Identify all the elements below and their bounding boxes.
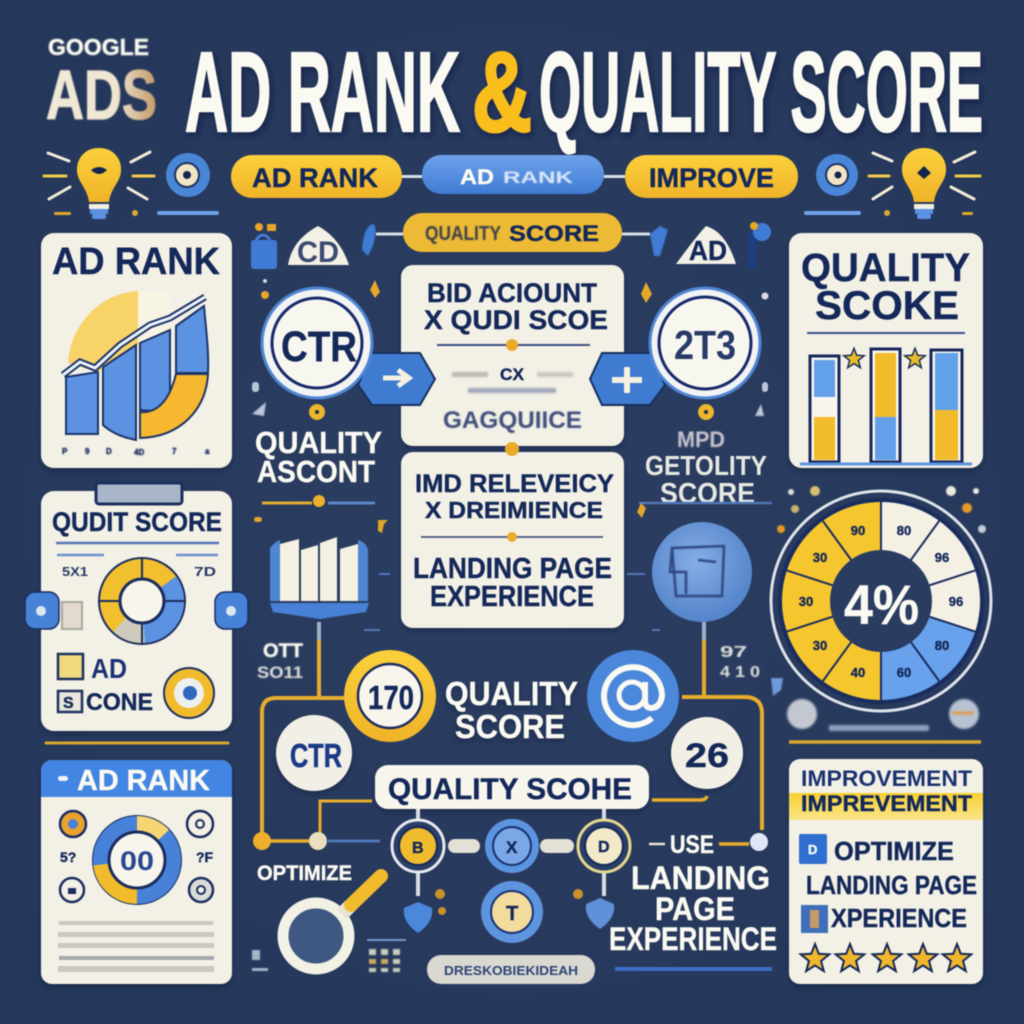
icon: left diamond [252, 382, 325, 420]
text lines [58, 921, 214, 972]
panel: formula box one: GAGQUIICE [443, 407, 582, 434]
panel: quality score chart card: SCOKE [815, 284, 959, 328]
axis labels: 9 [85, 447, 90, 456]
formula text: IMD RELEVEICY [415, 470, 614, 498]
main title: AD RANK [185, 29, 460, 155]
icon: bar stand [270, 537, 369, 619]
label: small right values [720, 644, 760, 681]
bar chart [800, 349, 972, 464]
flow node: lower: T [506, 903, 518, 925]
label: small left values: SO11 [257, 663, 303, 682]
star rating [801, 944, 971, 971]
connector dot [505, 442, 519, 456]
label: quality ascont: ASCONT [257, 454, 375, 489]
flow node: yellow: B [412, 840, 424, 857]
axis labels: 4D [134, 448, 144, 457]
panel: ad rank chart card [41, 233, 232, 468]
panel: ad rank donut card [41, 760, 232, 984]
icon: left target [166, 153, 210, 197]
panel: formula box two: EXPERIENCE [430, 581, 594, 613]
badge: right numeric circle [650, 288, 760, 398]
pill: small caption: DRESKOBIEKIDEAH [444, 963, 578, 978]
icon: left decorative figure [251, 223, 380, 299]
icon: AD tent badge: AD [689, 235, 727, 266]
decorative left dashes [54, 210, 219, 216]
main title: & [472, 29, 532, 155]
label: small right values: 97 [720, 644, 747, 661]
pill: blue ad: RANK [503, 168, 574, 187]
card [789, 233, 983, 468]
side tabs [25, 592, 248, 629]
label: small left values: OTT [263, 641, 303, 662]
axis labels: P [62, 447, 68, 456]
connector: right flow line [682, 622, 762, 830]
legend [58, 653, 153, 716]
card [789, 759, 983, 984]
icon: right target [816, 154, 858, 196]
wheel labels: 96 [949, 594, 963, 609]
heading: QUALITY [801, 246, 970, 290]
pill: ad rank: AD RANK [252, 163, 379, 193]
connector: flow links [418, 809, 604, 896]
decorative right dashes [804, 210, 973, 216]
axis labels: a [205, 447, 210, 456]
arrow: right-pointing tag [358, 353, 435, 405]
label: small right values: 4 1 0 [720, 664, 760, 681]
flow node: cream [578, 820, 630, 872]
badge: left CTR circle [262, 288, 372, 398]
divider: blue lower [615, 967, 772, 971]
panel: formula box one: X QUDI SCOE [424, 305, 608, 335]
icon: magnifier [283, 876, 381, 969]
legend: CONE [86, 689, 153, 716]
icon: map circle [652, 522, 752, 622]
title group [46, 29, 983, 155]
heading: IMPROVEMENT [801, 766, 973, 791]
highlighted heading: IMPREVEMENT [801, 791, 973, 816]
icon: right light bulb [869, 148, 980, 219]
stars [844, 348, 925, 368]
label: quality score right: MPD [677, 427, 725, 452]
pill: small caption [427, 955, 595, 984]
badge: 170 circle: 170 [368, 679, 414, 716]
wheel labels: 40 [851, 665, 865, 680]
icon: grey blobs [787, 699, 979, 731]
card [41, 491, 232, 731]
panel: formula box two: LANDING PAGE [413, 553, 612, 585]
label: quality score center: QUALITY [445, 675, 578, 712]
Google Ads logo text: ADS [46, 56, 157, 134]
pill: improve: IMPROVE [649, 163, 774, 193]
clip tab [96, 483, 182, 504]
panel: ad rank donut card: ?F [196, 849, 214, 865]
item: optimize: D [808, 842, 817, 857]
wheel labels: 30 [799, 594, 813, 609]
label: use landing page experience: USE [670, 831, 714, 859]
flow node: lower [481, 881, 543, 943]
small icons [60, 811, 213, 902]
mini labels: 5? [60, 849, 76, 865]
wheel labels: 80 [897, 523, 911, 538]
icon: small grid [252, 940, 406, 972]
label: quality score right [645, 427, 767, 510]
wheel labels: 96 [935, 550, 949, 565]
panel: formula box two: X DREIMIENCE [425, 497, 603, 523]
card [41, 760, 232, 984]
pill: blue ad: AD [460, 166, 494, 189]
decorative center-left markers [254, 495, 390, 630]
donut chart [92, 815, 182, 905]
pill: improve [625, 155, 798, 198]
label: quality score right: SCORE [660, 478, 755, 510]
panel: formula box one: CX [500, 365, 525, 384]
Google Ads logo text [46, 34, 157, 134]
arrow: plus tag [590, 353, 665, 405]
icon: ring [164, 668, 214, 718]
wheel labels: 90 [851, 523, 865, 538]
label: small left values [257, 641, 303, 682]
wheel labels: 80 [935, 638, 949, 653]
card [41, 233, 232, 468]
label: use landing page experience: PAGE [655, 891, 735, 927]
item: optimize: OPTIMIZE [834, 836, 954, 866]
wheel labels: 60 [897, 665, 911, 680]
pill: blue ad [422, 155, 604, 194]
panel: quality score chart card [789, 233, 983, 468]
heading: QUDIT SCORE [52, 507, 222, 537]
badge: 26: 26 [685, 737, 729, 775]
icon: right decorative figure [641, 222, 771, 303]
label: quality ascont: QUALITY [255, 425, 382, 460]
badge: 170 circle [344, 650, 436, 742]
donut chart: 00 [120, 846, 154, 876]
divider: right yellow [789, 740, 981, 744]
icon: CD tent badge [288, 226, 349, 269]
item: landing page: LANDING PAGE [806, 870, 977, 900]
badge: left CTR circle: CTR [281, 323, 357, 371]
decorative right center marks [627, 503, 772, 630]
icons: shields and dots [404, 889, 614, 933]
heading: AD RANK [77, 765, 210, 797]
badge: right numeric circle: 2T3 [674, 322, 736, 368]
panel: quality score donut card: 7D [194, 564, 216, 579]
badge: 26 [671, 717, 743, 789]
chart [63, 291, 208, 440]
panel: quality score donut card [25, 483, 248, 731]
label: use landing page experience [609, 831, 777, 957]
card [401, 265, 624, 446]
label: use landing page experience: LANDING [631, 860, 770, 896]
axis labels: D [106, 447, 112, 456]
flow node: cream: D [598, 839, 610, 856]
small labels: 5X1 [62, 564, 88, 579]
label: use landing page experience: EXPERIENCE [609, 921, 777, 957]
label: optimize: OPTIMIZE [257, 862, 352, 885]
main title [185, 29, 983, 155]
label: quality score center [445, 675, 578, 745]
flow node: blue: X [506, 838, 518, 857]
icon: AD tent badge [676, 226, 736, 266]
flow node: yellow [392, 820, 444, 872]
badge: CTR small: CTR [290, 737, 342, 774]
pill: quality score lower: QUALITY SCOHE [388, 773, 632, 806]
icon: CD tent badge: CD [297, 236, 339, 269]
divider: left yellow [46, 742, 228, 744]
header band [41, 760, 232, 797]
badge: CTR small [276, 715, 352, 791]
legend: AD [91, 653, 127, 684]
pill: quality score: SCORE [509, 221, 599, 246]
panel: formula box two [401, 442, 624, 628]
pill: quality score lower [375, 765, 649, 809]
connector: left flow line [262, 622, 380, 841]
axis labels: 7 [172, 447, 177, 456]
donut chart [98, 557, 186, 645]
connector: right yellow tick [652, 796, 707, 800]
flow nodes left [253, 832, 327, 850]
formula text: BID ACIOUNT [427, 278, 597, 308]
pill: quality score [376, 213, 650, 252]
icon: at sign circle [587, 650, 679, 742]
pill: ad rank [231, 155, 625, 198]
heading: AD RANK [52, 241, 221, 283]
wheel labels: 30 [813, 638, 827, 653]
flow node: blue [485, 819, 539, 873]
panel: improvement card [789, 759, 983, 984]
Google Ads logo text: GOOGLE [48, 34, 149, 60]
icon: left light bulb [44, 148, 154, 219]
wheel labels [799, 523, 963, 680]
panel: formula box one [401, 265, 624, 446]
icon: right diamond [698, 382, 768, 420]
label: quality score right: GETOLITY [645, 450, 767, 481]
axis labels [62, 447, 210, 457]
wheel labels: 30 [813, 550, 827, 565]
item: experience: XPERIENCE [831, 903, 967, 933]
legend: S [63, 695, 74, 712]
wheel decorations [771, 486, 986, 696]
card [401, 452, 624, 628]
label: quality ascont [255, 425, 382, 489]
wheel value: 4% [844, 573, 919, 636]
chart: percentage wheel [771, 491, 991, 711]
label: quality score center: SCORE [455, 708, 565, 745]
pill: quality score: QUALITY [425, 223, 502, 245]
